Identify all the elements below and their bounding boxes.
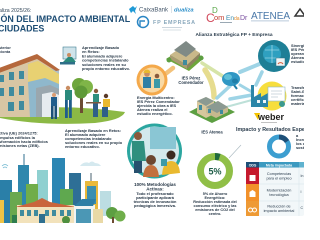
text block: energy saving: 5% de Ahorro	[203, 192, 228, 196]
chart: 5% donut	[200, 145, 241, 186]
icon: brain	[222, 72, 240, 89]
illustration: IES Atenea building	[189, 97, 235, 123]
title	[0, 8, 131, 34]
table: SDG goals	[246, 162, 304, 216]
icon: digital brain top	[258, 40, 290, 72]
ODS 8 badge	[246, 168, 259, 184]
text block: challenge learning top: en Retos:	[82, 49, 100, 54]
table: SDG goals: In	[300, 174, 303, 178]
logo: dualiza	[171, 6, 194, 14]
text block: challenge learning top: Aprendizaje Basado	[82, 45, 120, 50]
text block: challenge learning: soluciones reales en su propio	[65, 140, 123, 145]
logo: ComEnda	[206, 6, 248, 25]
table: SDG goals: Modernización	[267, 188, 291, 192]
table: SDG goals: Reducción de	[267, 204, 291, 208]
text block: challenge learning top: propio entorno educativo.	[82, 66, 130, 71]
text block: energy saving: Reducción estimada del	[193, 200, 237, 204]
text block: directive	[0, 130, 48, 148]
text block: energy saving: emisiones de CO2 del	[195, 208, 235, 212]
chart: blue donut	[270, 137, 288, 156]
illustration: smart city	[0, 154, 126, 224]
table: SDG goals: Meta impactada	[266, 163, 292, 167]
text block: energy saving	[193, 192, 237, 216]
text block: cost saving	[296, 133, 309, 150]
text block: energy saving: consumo eléctrico y las	[193, 204, 237, 208]
text block: multicentre energy: Atenea realiza el	[137, 107, 168, 112]
logo: ComEnda: Dr	[240, 15, 248, 22]
illustration: factory and certificate	[251, 82, 286, 110]
table: SDG goals: Competencias	[267, 172, 291, 176]
logo: ATENEA: ATENEA	[251, 11, 290, 22]
ODS 11 badge	[246, 184, 259, 201]
label: IES Pérez Comendador: IES Pérez	[182, 76, 200, 80]
text block: multicentre energy: estudio energético.	[137, 111, 173, 116]
table: SDG goals: tecnológica	[269, 193, 289, 197]
text block: active methodologies: Activas:	[146, 186, 164, 192]
logo: ComEnda: om	[214, 13, 224, 22]
table: SDG goals: ODS	[249, 163, 257, 167]
text block: directive: sformación hacia edificios	[0, 139, 48, 144]
text block: challenge learning top: soluciones reales en su	[82, 62, 127, 67]
text block: energy saving: centro.	[209, 212, 221, 216]
logo: FP Empresa: FP EMPRESA	[153, 20, 195, 26]
chart: 5% donut: 5%	[208, 166, 222, 176]
text block: challenge learning top: El alumnado adquiere	[82, 53, 123, 58]
title: IÓN DEL IMPACTO AMBIENTAL	[0, 13, 131, 24]
network connections	[164, 58, 262, 107]
text block: challenge learning top: competencias instalando	[82, 58, 129, 63]
text block: active methodologies: Todo el profesorado	[136, 191, 174, 196]
icon: renewable worker	[60, 47, 76, 64]
illustration: IES Pérez Comendador building	[166, 41, 204, 71]
icon: orange team circle	[136, 64, 168, 96]
ODS 12 badge	[246, 201, 259, 216]
text block: challenge learning: competencias instalando	[65, 136, 112, 141]
text block: active methodologies: técnicas de innovación	[134, 199, 177, 204]
text block: directive: misiones netas (ZEB).	[0, 143, 40, 148]
text block: directive: impulsa edificios la	[0, 135, 36, 140]
text block: active methodologies: pedagógica inmersiva.	[134, 203, 176, 208]
illustration: teal classroom circle	[127, 124, 182, 178]
logo: CaixaBank: CaixaBank	[139, 8, 169, 14]
label: IES Pérez Comendador	[178, 76, 204, 85]
text block: challenge learning: El alumnado adquiere	[65, 132, 106, 137]
text block: active methodologies	[134, 182, 177, 208]
text block: cost saving: a	[296, 133, 299, 138]
logo: triangle mark	[295, 9, 305, 16]
text block: energy saving: Energético:	[205, 196, 225, 200]
label: IES Atenea: IES Atenea	[201, 130, 223, 134]
text block: directive: ctiva (UE) 2024/1275:	[0, 130, 38, 136]
text block: multicentre energy: Energía Multicentro:	[137, 95, 175, 100]
illustration: house retrofit	[0, 54, 125, 124]
logo: Weber: weber	[257, 112, 285, 122]
text block: challenge learning top	[82, 45, 130, 71]
text block: multicentre energy	[137, 95, 180, 116]
logo: ComEnda: En	[226, 15, 234, 22]
logo: CaixaBank	[129, 6, 169, 14]
text block: challenge learning: Aprendizaje Basado en Retos:	[65, 128, 121, 133]
text block: challenge learning	[65, 128, 123, 149]
logo: ComEnda: C	[206, 11, 215, 25]
logo: dualiza: dualiza	[174, 8, 194, 14]
table: SDG goals: impacto ambiental	[264, 209, 295, 213]
text block: knowledge transfer	[291, 85, 309, 106]
logo: FP Empresa	[138, 16, 195, 30]
table: SDG goals: I	[300, 190, 302, 194]
table: SDG goals: C	[300, 206, 304, 210]
label: IES Pérez Comendador: Comendador	[178, 80, 204, 85]
logo: ComEnda: da	[234, 16, 240, 22]
logo: ComEnda: D	[212, 6, 218, 15]
text block: active methodologies: 100% Metodologías	[134, 182, 176, 187]
text block: exterior	[0, 46, 11, 58]
text block: active methodologies: participante aplicará	[136, 195, 175, 200]
table: SDG goals: para el empleo	[266, 176, 292, 180]
text block: challenge learning: entorno educativo.	[65, 144, 100, 149]
text block: multicentre energy: IES Pérez Comendador	[137, 99, 180, 104]
text block: energy synergy	[291, 43, 309, 64]
heading: alliance: Alianza Estratégica FP + Empresa	[195, 32, 273, 38]
text block: multicentre energy: ajercida la obra a IES	[137, 103, 177, 108]
